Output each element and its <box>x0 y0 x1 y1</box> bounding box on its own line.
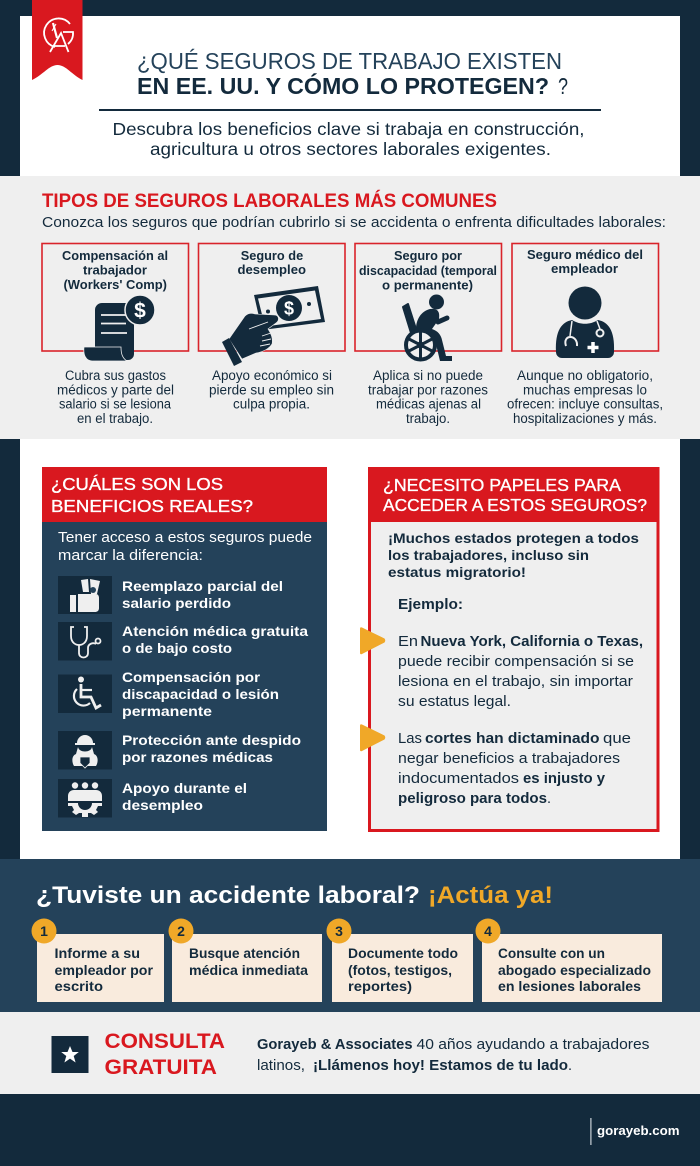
step 2: Busque atención <box>189 946 300 961</box>
icon: hand with money <box>222 286 325 366</box>
card: compensación al trabajador: médicos y parte del <box>57 382 174 398</box>
panel: accidente laboral <box>0 859 700 1012</box>
text: gorayeb and associates: Gorayeb & Associates <box>257 1037 412 1053</box>
item: compensación por discapacidad: permanente <box>122 703 212 719</box>
card: compensación al trabajador: Cubra sus gastos <box>65 368 166 383</box>
item: atención médica <box>58 622 308 660</box>
icon: hand with money: $ <box>284 298 294 318</box>
item: compensación por discapacidad <box>58 669 279 719</box>
heading: accidente laboral <box>36 882 553 909</box>
footer: website <box>590 1118 680 1145</box>
panel: consulta gratuita <box>0 1012 700 1094</box>
item: reemplazo de salario: Reemplazo parcial del <box>122 578 283 594</box>
text: cortes <box>398 731 631 807</box>
title <box>137 48 568 99</box>
heading: beneficios <box>51 474 253 516</box>
text: cortes: Las <box>398 731 422 747</box>
icon: worker with shield <box>72 735 98 768</box>
text: ejemplo nueva york: En <box>398 634 418 650</box>
text: introduction: Conozca los seguros que podrían cubrirlo si se accidenta o enfrenta dificultades laborales: <box>42 214 666 231</box>
icon: document with dollar: $ <box>134 300 146 322</box>
text: gorayeb and associates <box>257 1037 650 1074</box>
heading: consulta gratuita <box>104 1029 225 1079</box>
card: seguro médico del empleador: empleador <box>551 261 618 276</box>
card: seguro por discapacidad: médicas ajenas al <box>376 396 481 412</box>
icon: team with gear <box>68 782 102 817</box>
text: ejemplo nueva york: su estatus legal. <box>398 694 511 710</box>
step 3: (fotos, testigos, <box>348 963 452 978</box>
step 4: Consulte con un <box>498 946 605 961</box>
item: protección ante despido: Protección ante despido <box>122 732 301 748</box>
heading: accidente laboral: ¡Actúa ya! <box>428 882 553 909</box>
icon: person in wheelchair <box>403 294 452 361</box>
card: seguro de desempleo: desempleo <box>238 262 306 277</box>
step 2: 2 <box>177 923 185 939</box>
icon: stethoscope <box>71 627 100 658</box>
subtitle: Descubra los beneficios clave si trabaja en construcción, <box>112 119 584 139</box>
panel: white content background <box>20 439 680 859</box>
text: cortes: cortes han dictaminado <box>425 731 600 747</box>
item: protección ante despido <box>58 731 301 770</box>
text: cortes: negar beneficios a trabajadores <box>398 751 620 767</box>
step 3 <box>326 918 473 1002</box>
step 1: Informe a su <box>54 946 140 961</box>
item: compensación por discapacidad: Compensación por <box>122 669 261 685</box>
card: seguro médico del empleador: hospitalizaciones y más. <box>513 411 657 426</box>
card: seguro médico del empleador <box>507 244 663 426</box>
text: cortes: indocumentados <box>398 771 519 787</box>
step 1 <box>32 918 164 1002</box>
card: seguro por discapacidad: o permanente) <box>382 278 473 292</box>
step 3: Documente todo <box>348 946 458 961</box>
card: seguro médico del empleador: ofrecen: incluye consultas, <box>507 396 663 412</box>
text: cortes: es injusto y <box>523 771 605 787</box>
card: seguro de desempleo: culpa propia. <box>233 396 310 412</box>
heading: beneficios: BENEFICIOS REALES? <box>51 496 253 516</box>
icon: arrow one <box>360 627 385 654</box>
step 4: abogado especializado <box>498 963 651 978</box>
text: ejemplo nueva york: Nueva York, California o Texas, <box>420 634 643 650</box>
card: compensación al trabajador <box>42 244 188 426</box>
card: seguro médico del empleador: Aunque no obligatorio, <box>517 368 653 383</box>
heading: papeles: ¿NECESITO PAPELES PARA <box>383 475 621 495</box>
card: seguro de desempleo: pierde su empleo sin <box>209 382 334 398</box>
item: atención médica: Atención médica gratuita <box>122 623 308 639</box>
heading: consulta gratuita: GRATUITA <box>104 1055 217 1079</box>
card: compensación al trabajador: (Workers' Comp) <box>64 277 167 292</box>
text: gorayeb and associates: ¡Llámenos hoy! Estamos de tu lado <box>313 1058 568 1074</box>
title: ¿QUÉ SEGUROS DE TRABAJO EXISTEN <box>137 48 562 74</box>
item: compensación por discapacidad: discapacidad o lesión <box>122 686 279 702</box>
panel: tipos de seguros <box>0 176 700 439</box>
card: seguro de desempleo <box>198 244 345 412</box>
text: gorayeb and associates: latinos, <box>257 1058 305 1074</box>
heading: tipos de seguros: TIPOS DE SEGUROS LABORALES MÁS COMUNES <box>42 190 497 212</box>
item: apoyo durante el desempleo <box>58 779 247 818</box>
step 4: en lesiones laborales <box>498 979 641 994</box>
heading: papeles <box>383 475 647 515</box>
icon: wheelchair symbol <box>74 676 101 708</box>
text: ejemplo nueva york: puede recibir compensación si se <box>398 654 634 670</box>
card: seguro por discapacidad: discapacidad (temporal <box>359 263 497 278</box>
icon: logo ribbon <box>32 0 82 80</box>
card: seguro por discapacidad: Aplica si no puede <box>373 368 483 383</box>
step 4 <box>476 918 662 1002</box>
item: reemplazo de salario <box>58 576 283 614</box>
text: muchos estados: estatus migratorio! <box>388 564 526 580</box>
text: ejemplo nueva york <box>398 634 643 710</box>
step 2 <box>168 918 322 1002</box>
icon: document with dollar <box>84 295 155 361</box>
text: muchos estados: ¡Muchos estados protegen a todos <box>388 530 639 546</box>
item: reemplazo de salario: salario perdido <box>122 595 231 611</box>
card: compensación al trabajador: salario si se lesiona <box>59 396 171 412</box>
text: beneficios intro: Tener acceso a estos seguros puede <box>58 530 312 546</box>
card: seguro por discapacidad: trabajo. <box>406 411 450 426</box>
subtitle: agricultura u otros sectores laborales exigentes. <box>150 139 551 159</box>
text: muchos estados <box>388 530 639 580</box>
card: seguro por discapacidad: trabajar por razones <box>368 382 488 398</box>
card: seguro médico del empleador: muchas empresas lo <box>523 382 647 398</box>
icon: doctor <box>556 286 614 358</box>
text: cortes: que <box>603 731 631 747</box>
icon: star <box>52 1036 88 1073</box>
step 3: 3 <box>335 923 343 939</box>
card: seguro de desempleo: Seguro de <box>241 248 303 263</box>
item: atención médica: o de bajo costo <box>122 640 232 656</box>
item: apoyo durante el desempleo: desempleo <box>122 797 203 813</box>
heading: accidente laboral: ¿Tuviste un accidente laboral? <box>36 882 420 909</box>
card: seguro médico del empleador: Seguro médico del <box>527 247 643 262</box>
card: seguro de desempleo: Apoyo económico si <box>212 368 332 383</box>
step 1: empleador por <box>54 963 154 978</box>
title: ? <box>558 73 568 99</box>
step 3: reportes) <box>348 979 412 994</box>
card: seguro por discapacidad: Seguro por <box>394 248 462 263</box>
card: compensación al trabajador: trabajador <box>83 262 147 278</box>
text: ejemplo: Ejemplo: <box>398 597 463 613</box>
panel: header <box>20 0 680 176</box>
text: muchos estados: los trabajadores, incluso sin <box>388 547 589 563</box>
panel: beneficios reales <box>42 467 327 831</box>
subtitle <box>112 119 584 159</box>
icon: arrow two <box>360 724 385 751</box>
step 2: médica inmediata <box>189 963 309 978</box>
text: beneficios intro <box>58 530 312 564</box>
text: beneficios intro: marcar la diferencia: <box>58 548 203 564</box>
item: protección ante despido: por razones médicas <box>122 749 273 765</box>
text: cortes: . <box>547 791 551 807</box>
text: gorayeb and associates: 40 años ayudando a trabajadores <box>416 1037 650 1053</box>
card: compensación al trabajador: Compensación al <box>62 248 168 263</box>
icon: hand with cash <box>70 579 100 612</box>
step 1: 1 <box>40 923 48 939</box>
panel: necesito papeles <box>360 467 659 830</box>
text: ejemplo nueva york: lesiona en el trabajo, sin importar <box>398 674 633 690</box>
step 1: escrito <box>54 979 103 994</box>
heading: beneficios: ¿CUÁLES SON LOS <box>51 474 223 494</box>
heading: consulta gratuita: CONSULTA <box>104 1029 225 1053</box>
item: apoyo durante el desempleo: Apoyo durante el <box>122 780 247 796</box>
step 4: 4 <box>484 923 492 939</box>
footer: website: gorayeb.com <box>597 1123 680 1138</box>
card: seguro por discapacidad <box>355 244 502 426</box>
text: gorayeb and associates: . <box>568 1058 572 1074</box>
title: EN EE. UU. Y CÓMO LO PROTEGEN? <box>137 72 549 99</box>
heading: papeles: ACCEDER A ESTOS SEGUROS? <box>383 495 647 515</box>
card: compensación al trabajador: en el trabajo. <box>77 411 153 426</box>
text: cortes: peligroso para todos <box>398 791 547 807</box>
